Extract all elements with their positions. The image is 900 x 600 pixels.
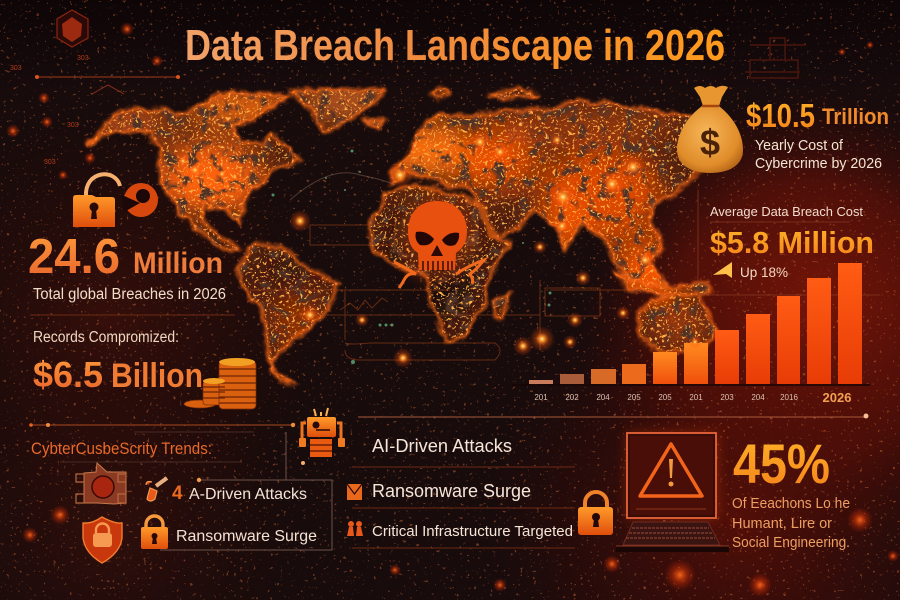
decorative labels top left: 303 (77, 55, 89, 62)
stat: 45%: 45% (733, 432, 830, 495)
caption: 45 percent: Of Eeachons Lo he (732, 495, 850, 512)
caption: yearly cost: Yearly Cost of (755, 137, 844, 154)
axis labels: 205 (627, 393, 641, 402)
decorative labels top left (10, 55, 180, 166)
text: a-driven attacks: A-Driven Attacks (189, 486, 307, 503)
panel: average breach cost (512, 190, 880, 405)
label: records compromised: Records Compromized: (33, 329, 179, 346)
panel: trends list center (347, 414, 868, 548)
panel: cybersecurity trends left (29, 423, 332, 563)
panel: 45 percent (732, 432, 850, 551)
glyph: orange 4: 4 (172, 483, 183, 504)
icon: robot (299, 408, 345, 465)
icon: broken chain (146, 478, 167, 501)
caption: yearly cost (755, 137, 882, 172)
axis labels (534, 390, 851, 405)
icon: broken swirl (122, 183, 158, 217)
stat: 24.6 Million: Million (133, 247, 223, 280)
label: up 18 percent: Up 18% (740, 264, 788, 280)
faint top-right circuit icon (745, 38, 805, 78)
axis labels: 205 (658, 393, 672, 402)
icon: envelope shield (347, 484, 362, 500)
axis labels: 204 (596, 393, 610, 402)
stat: 10.5 trillion: Trillion (822, 104, 889, 129)
text: ransomware surge: Ransomware Surge (176, 528, 317, 545)
ocean data dots (272, 150, 552, 364)
icon: padlock (141, 516, 168, 549)
map network lines (250, 173, 690, 360)
top-left hexagon icon (57, 10, 88, 47)
title: Data Breach Landscape in 2026 (185, 21, 725, 70)
text: ai-driven attacks: AI-Driven Attacks (372, 436, 512, 456)
caption: 45 percent (732, 495, 850, 551)
stat: 5.8 million: $5.8 Million (710, 225, 874, 260)
caption: yearly cost: Cybercrime by 2026 (755, 155, 882, 172)
text: critical infrastructure: Critical Infrastructure Targeted (372, 523, 573, 540)
axis labels: 201 (689, 393, 703, 402)
icon: people cluster (347, 521, 363, 536)
panel: yearly cost (746, 97, 889, 172)
caption: 45 percent: Social Engineering. (732, 534, 850, 551)
stat: 6.5 Billion (33, 354, 203, 395)
caption: 45 percent: Humant, Lire or (732, 515, 832, 532)
stat: 6.5 Billion: $6.5 (33, 354, 103, 395)
axis labels: 201 (534, 393, 548, 402)
icon: open padlock (73, 174, 120, 227)
icon: money bag: $ (700, 122, 720, 163)
panel: total breaches (28, 174, 226, 303)
icon: coin stacks (184, 358, 256, 409)
axis labels: 2016 (780, 393, 798, 402)
decorative labels top left: 303 (44, 159, 56, 166)
axis labels: 203 (720, 393, 734, 402)
icon: laptop warning (616, 433, 729, 552)
axis labels: 202 (565, 393, 579, 402)
icon: up arrow (713, 262, 732, 278)
icon: shield with lock (83, 517, 122, 563)
caption: total breaches: Total global Breaches in 2026 (33, 286, 226, 303)
axis labels: 2026 (823, 390, 851, 405)
text: ransomware surge: Ransomware Surge (372, 481, 531, 501)
stat: 24.6 Million (28, 230, 223, 284)
icon: money bag (677, 86, 743, 173)
stat: 24.6 Million: 24.6 (28, 230, 120, 284)
panel: records compromised (30, 315, 256, 409)
decorative labels top left: 303 (67, 122, 79, 129)
stat: 6.5 Billion: Billion (111, 357, 203, 395)
bar chart (512, 263, 870, 405)
skull icon (394, 198, 484, 288)
heading: trends: CybterCusbeScrity Trends: (31, 439, 212, 458)
axis labels: 204 (751, 393, 765, 402)
icon: large padlock (578, 492, 613, 535)
label: average cost: Average Data Breach Cost (710, 204, 863, 219)
world map (80, 82, 730, 390)
decorative labels top left: 303 (10, 65, 22, 72)
stat: 10.5 trillion: $10.5 (746, 97, 815, 134)
icon: chip badge (76, 463, 126, 504)
stat: 10.5 trillion (746, 97, 889, 134)
